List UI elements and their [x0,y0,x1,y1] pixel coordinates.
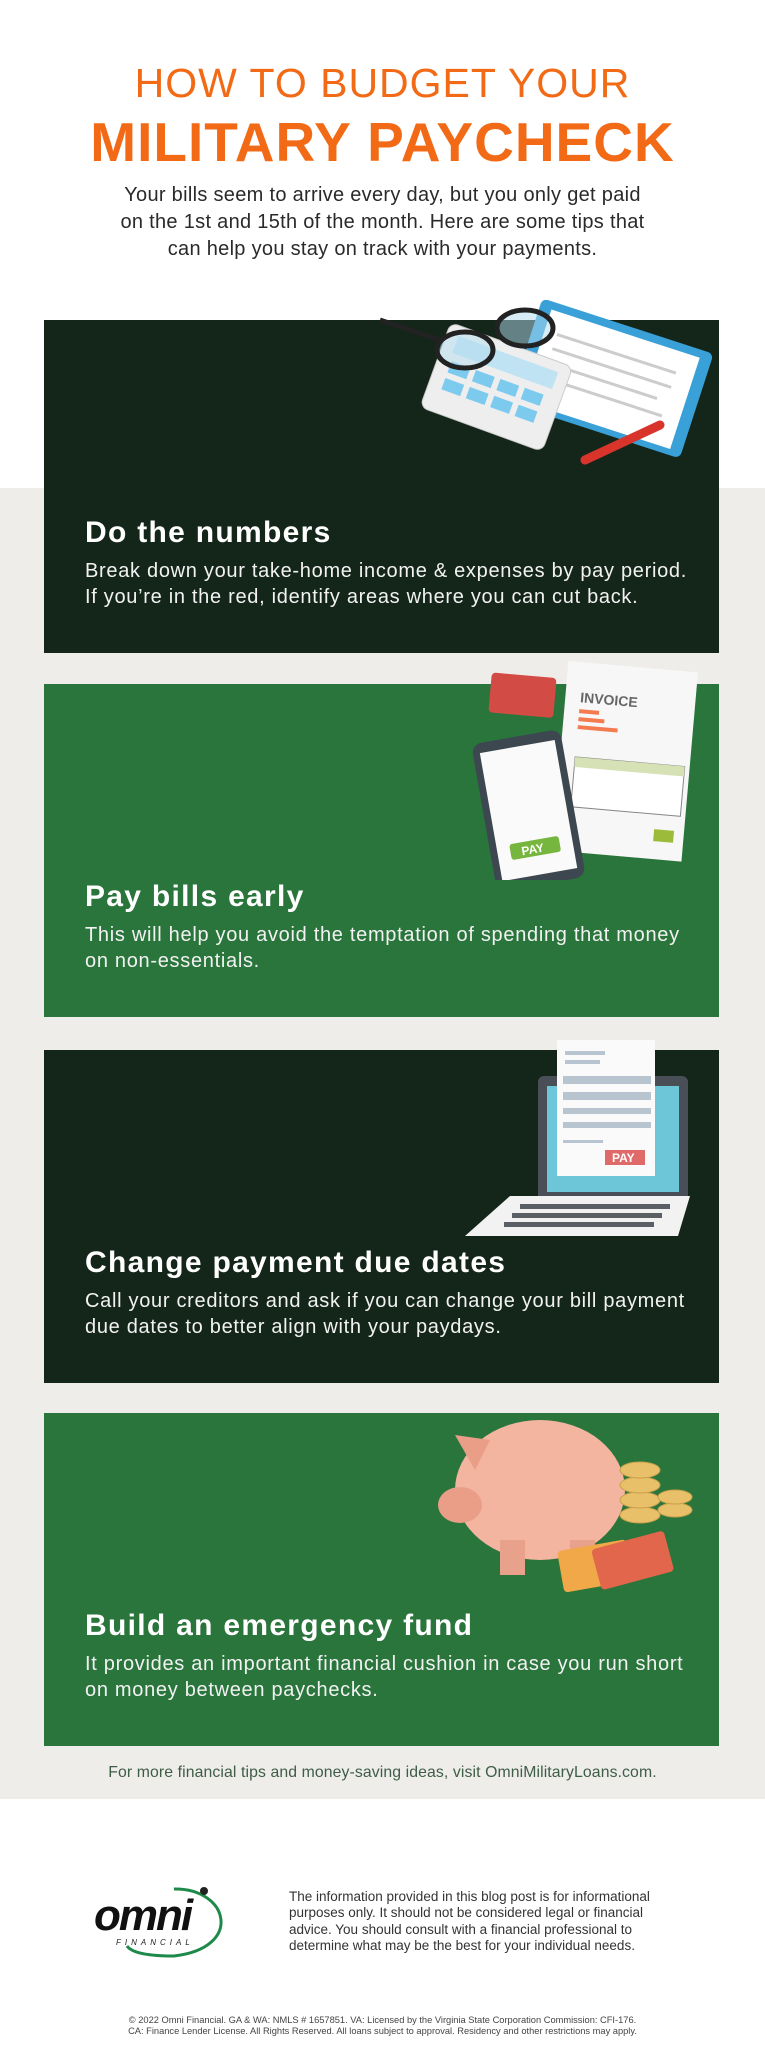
text: on non-essentials. [85,950,260,972]
icon: piggy bank, coins, cards [438,1420,692,1592]
text: This will help you avoid the temptation of spending that money [85,924,680,946]
heading: Change payment due dates [85,1246,506,1279]
copyright [128,2015,637,2036]
intro text: on the 1st and 15th of the month. Here are some tips that [120,211,645,233]
text: Break down your take-home income & expenses by pay period. [85,560,687,582]
disclaimer text: determine what may be the best for your individual needs. [289,1938,635,1953]
icon: calculator and clipboard [380,300,712,464]
disclaimer text: The information provided in this blog post is for informational [289,1889,650,1904]
heading: Do the numbers [85,516,332,549]
copyright: CA: Finance Lender License. All Rights Reserved. All loans subject to approval. Residency and other restrictions may apply. [128,2026,637,2036]
icon: invoice, card and phone: INVOICE [580,689,638,710]
disclaimer text: advice. You should consult with a financial professional to [289,1922,632,1937]
text: Call your creditors and ask if you can change your bill payment [85,1290,685,1312]
panel: change payment due dates [44,1050,719,1383]
title: HOW TO BUDGET YOUR [135,60,630,106]
logo: omni financial [94,1887,223,1958]
text [85,924,680,972]
logo: omni financial: omni [94,1891,191,1940]
heading: Build an emergency fund [85,1609,473,1642]
text [85,1653,683,1701]
heading: Pay bills early [85,880,305,913]
logo: omni financial: FINANCIAL [116,1938,194,1947]
copyright: © 2022 Omni Financial. GA & WA: NMLS # 1657851. VA: Licensed by the Virginia State Corporation Commission: CFI-176. [129,2015,636,2025]
intro text: can help you stay on track with your payments. [168,238,597,260]
text [85,560,687,608]
icon: laptop with bill [465,1040,690,1236]
text [85,1290,685,1338]
panel: build an emergency fund [44,1413,719,1746]
footer link text: For more financial tips and money-saving ideas, visit OmniMilitaryLoans.com. [108,1764,657,1781]
disclaimer text [289,1889,650,1953]
text: It provides an important financial cushion in case you run short [85,1653,683,1675]
text: due dates to better align with your paydays. [85,1316,502,1338]
icon: laptop with bill: PAY [612,1151,635,1165]
disclaimer text: purposes only. It should not be considered legal or financial [289,1905,643,1920]
title [90,60,675,173]
text: on money between paychecks. [85,1679,379,1701]
intro text [120,184,645,260]
title: MILITARY PAYCHECK [90,111,675,173]
icon: invoice, card and phone [472,661,698,880]
panel: do the numbers [44,320,719,653]
intro text: Your bills seem to arrive every day, but you only get paid [124,184,641,206]
icon: invoice, card and phone: PAY [520,841,545,858]
text: If you’re in the red, identify areas where you can cut back. [85,586,638,608]
panel: pay bills early [44,684,719,1017]
